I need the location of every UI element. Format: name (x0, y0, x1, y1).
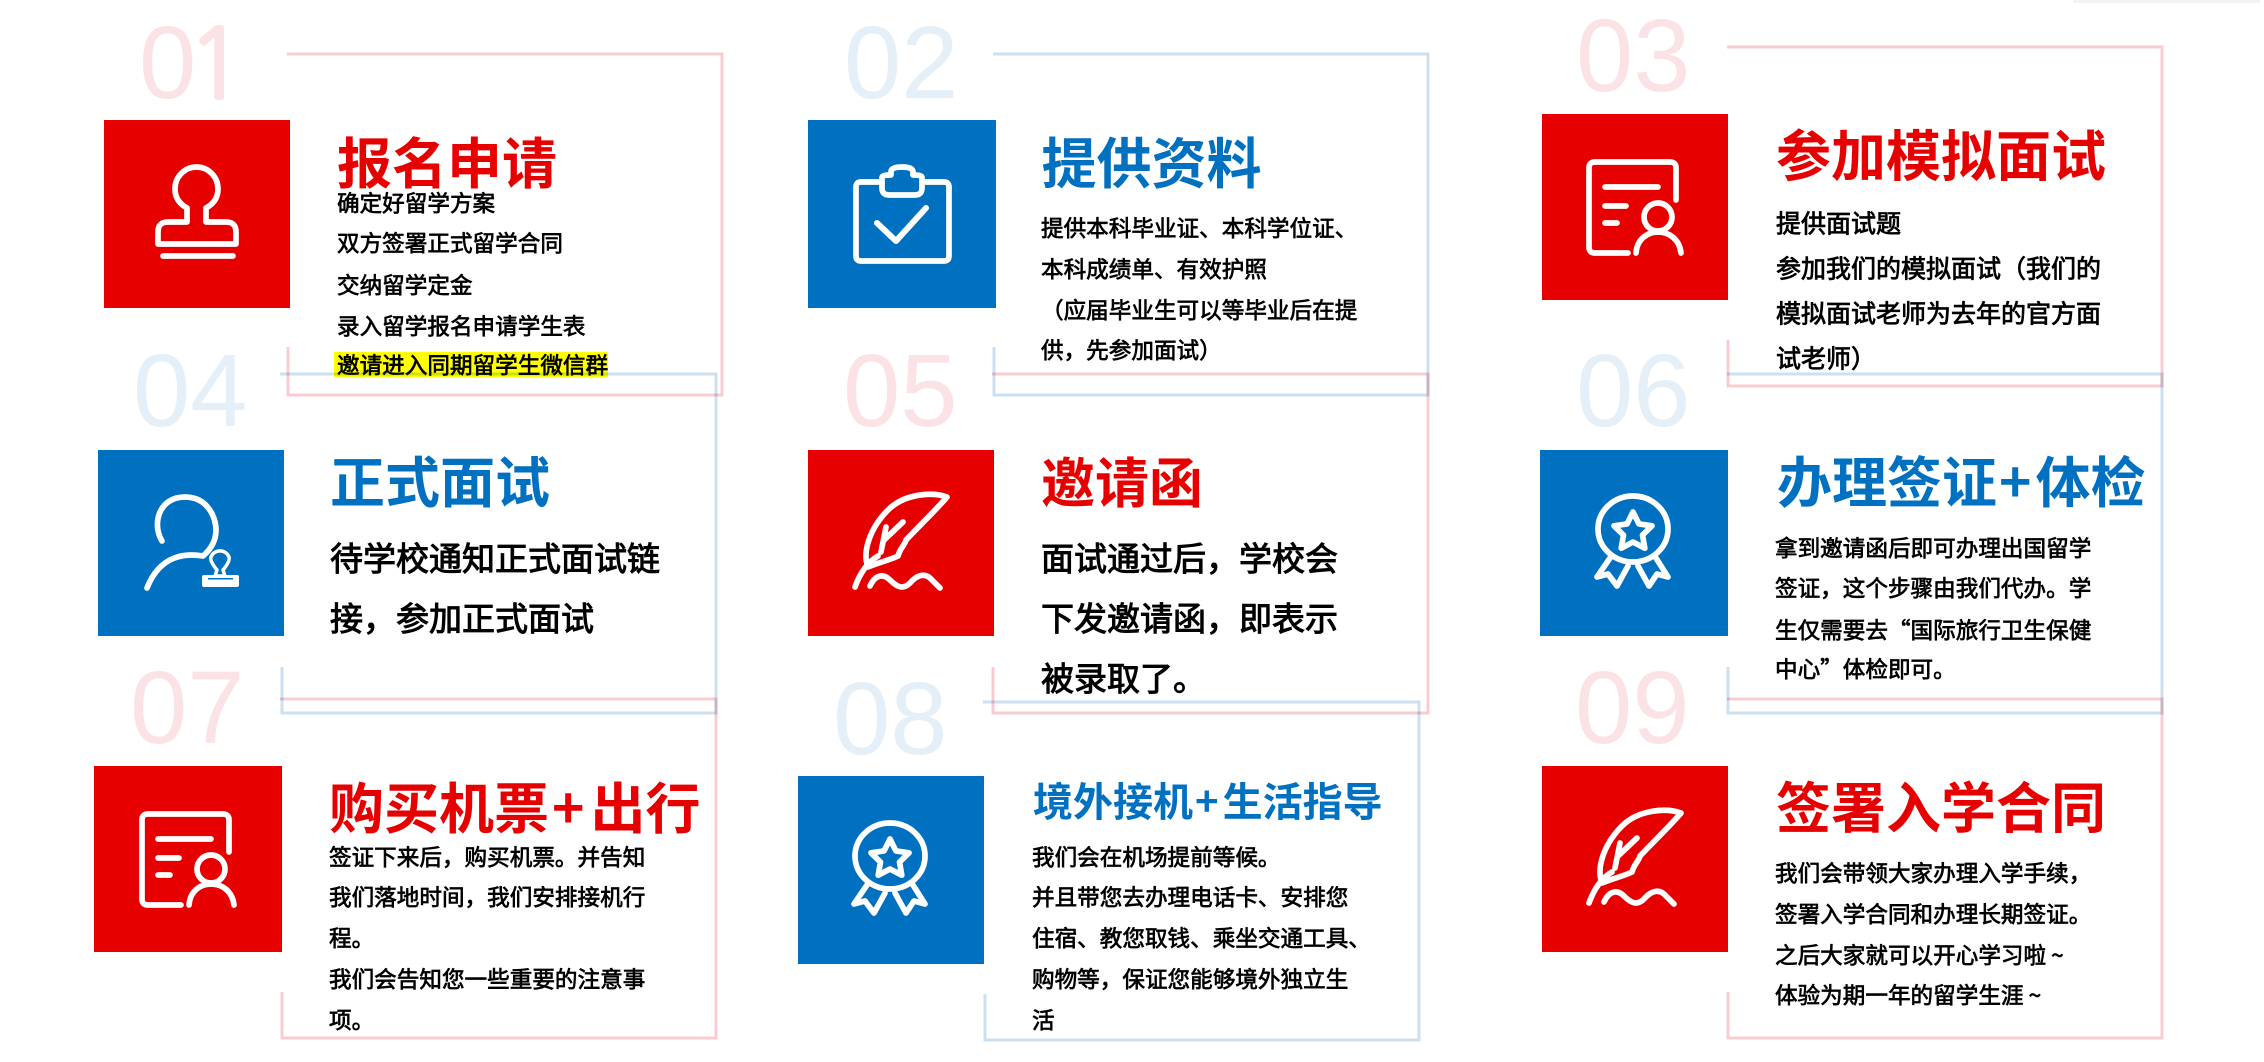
icon: feather quill (855, 494, 947, 588)
body text: 模拟面试老师为去年的官方面 (1776, 294, 2101, 330)
step number 06: 06 (1576, 333, 1691, 448)
body text: 供，先参加面试） (1041, 333, 1222, 366)
icon tile (98, 450, 284, 636)
body text: 购物等，保证您能够境外独立生 (1032, 962, 1348, 995)
icon tile (1542, 766, 1728, 952)
body text (1041, 211, 1357, 366)
body text: 邀请进入同期留学生微信群 (337, 348, 608, 381)
body text: 我们落地时间，我们安排接机行 (329, 880, 645, 913)
panel: step 02 提供资料 (808, 5, 1428, 395)
body text: 试老师） (1776, 340, 1876, 376)
frame (992, 374, 1428, 713)
body text: （应届毕业生可以等毕业后在提 (1041, 293, 1357, 326)
body text: 签署入学合同和办理长期签证。 (1775, 897, 2091, 930)
step number 03: 03 (1576, 0, 1691, 113)
icon tile (808, 120, 996, 308)
body text: 我们会在机场提前等候。 (1032, 840, 1281, 873)
body text: 项。 (329, 1003, 374, 1036)
icon: medal (854, 823, 925, 913)
body text: 双方签署正式留学合同 (337, 226, 563, 259)
step number 08: 08 (833, 661, 948, 776)
step number 07: 07 (130, 650, 245, 765)
frame (1727, 699, 2162, 1038)
body text: 本科成绩单、有效护照 (1041, 252, 1267, 285)
body text: 签证，这个步骤由我们代办。学 (1775, 571, 2091, 604)
panel: step 01 报名申请 (104, 5, 722, 395)
body text (1776, 204, 2101, 376)
icon: stamp (158, 167, 236, 256)
step number 04: 04 (133, 333, 248, 448)
panel: step 09 签署入学合同 (1542, 650, 2162, 1038)
icon tile (1540, 450, 1728, 636)
body text (1775, 856, 2091, 1011)
icon: document and person (1589, 162, 1681, 253)
title: 报名申请 (337, 120, 557, 200)
body text: 交纳留学定金 (337, 268, 473, 301)
body text (334, 186, 608, 381)
body text: 被录取了。 (1041, 652, 1206, 700)
body text: 活 (1032, 1003, 1055, 1036)
body text: 待学校通知正式面试链 (330, 532, 660, 580)
title: 参加模拟面试 (1776, 112, 2106, 192)
frame (287, 54, 722, 395)
body text: 中心”体检即可。 (1775, 652, 1956, 685)
body text (329, 840, 645, 1036)
frame (280, 374, 716, 713)
step number 01: 0 (139, 5, 196, 120)
body text: 之后大家就可以开心学习啦 ~ (1775, 938, 2064, 971)
frame (1727, 47, 2162, 386)
frame (280, 699, 716, 1038)
icon: document and person (142, 814, 234, 905)
body text: 提供本科毕业证、本科学位证、 (1041, 211, 1357, 244)
body text: 确定好留学方案 (337, 186, 495, 219)
body text: 体验为期一年的留学生涯 ~ (1775, 978, 2041, 1011)
body text (1041, 532, 1338, 700)
body text: 生仅需要去“国际旅行卫生保健 (1775, 613, 2091, 646)
body text: 参加我们的模拟面试（我们的 (1776, 250, 2101, 286)
step number 09: 09 (1575, 650, 1690, 765)
icon: clipboard with check (856, 167, 949, 261)
icon tile (104, 120, 290, 308)
body text: 拿到邀请函后即可办理出国留学 (1775, 531, 2091, 564)
body text: 签证下来后，购买机票。并告知 (329, 840, 645, 873)
body text: 面试通过后，学校会 (1041, 532, 1338, 580)
step number 02: 02 (844, 5, 959, 120)
panel: step 03 参加模拟面试 (1542, 0, 2162, 386)
icon: medal (1597, 496, 1668, 586)
frame (983, 702, 1419, 1040)
body text: 并且带您去办理电话卡、安排您 (1032, 880, 1348, 913)
panel: step 08 境外接机+生活指导 (798, 661, 1419, 1040)
panel: step 05 邀请函 (808, 333, 1428, 713)
icon tile (798, 776, 984, 964)
body text: 提供面试题 (1776, 204, 1901, 240)
title: 签署入学合同 (1776, 764, 2106, 844)
title: 提供资料 (1042, 120, 1262, 200)
body text (1775, 531, 2091, 685)
title: 邀请函 (1041, 440, 1203, 518)
panel: step 04 正式面试 (98, 333, 716, 713)
body text: 接，参加正式面试 (330, 592, 594, 640)
body text: 程。 (329, 921, 374, 954)
body text: 录入留学报名申请学生表 (337, 309, 586, 342)
icon: feather quill (1589, 810, 1681, 904)
icon tile (1542, 114, 1728, 300)
title: 正式面试 (330, 438, 550, 518)
title: 办理签证+体检 (1777, 438, 2145, 518)
title: 境外接机+生活指导 (1033, 770, 1383, 828)
icon: person with stamp (147, 497, 239, 588)
panel: step 07 购买机票+出行 (94, 650, 716, 1038)
icon tile (808, 450, 994, 636)
frame (993, 54, 1428, 395)
body text: 住宿、教您取钱、乘坐交通工具、 (1032, 921, 1371, 954)
body text: 我们会带领大家办理入学手续， (1775, 856, 2091, 889)
step number 05: 05 (843, 333, 958, 448)
body text: 下发邀请函，即表示 (1041, 592, 1338, 640)
icon tile (94, 766, 282, 952)
panel: step 06 办理签证+体检 (1540, 333, 2162, 713)
frame (1727, 374, 2162, 713)
body text (1032, 840, 1371, 1036)
body text (330, 532, 660, 640)
body text: 我们会告知您一些重要的注意事 (329, 962, 645, 995)
step number 01: 1 (187, 16, 245, 112)
title: 购买机票+出行 (329, 764, 700, 844)
